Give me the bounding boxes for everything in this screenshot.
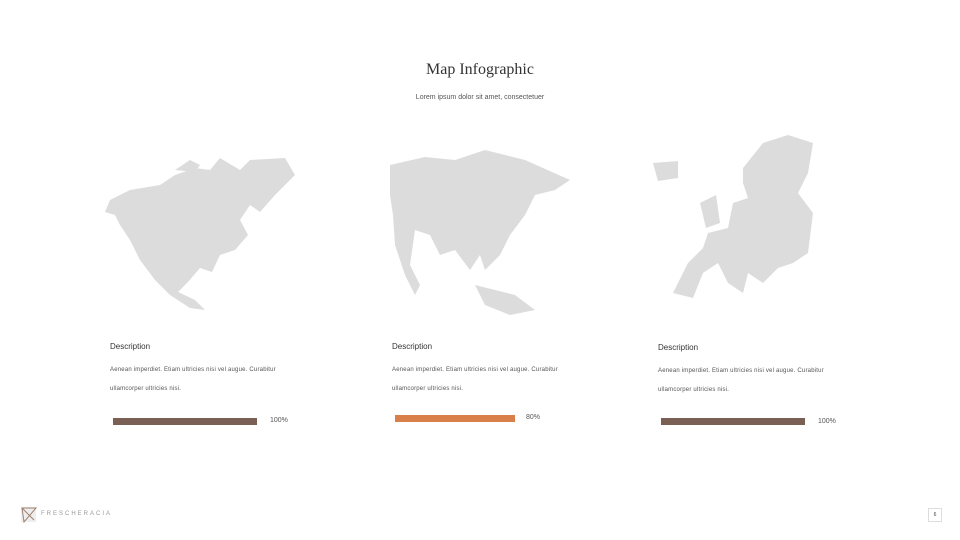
map: north america (105, 158, 295, 310)
label: 100% (270, 417, 288, 424)
label: 100% (818, 418, 836, 425)
panel: column 2 (392, 342, 558, 422)
page number: 6 (934, 512, 936, 518)
page number (928, 508, 942, 522)
map: europe (653, 135, 813, 298)
label: 80% (526, 414, 540, 421)
map: asia (390, 150, 570, 315)
logo (21, 507, 112, 523)
text: Aenean imperdiet. Etiam ultricies nisi vel augue. Curabitur ullamcorper ultricies nisi. (392, 367, 558, 392)
heading: Description (658, 343, 698, 352)
heading: Description (392, 342, 432, 351)
bar 80% (395, 415, 515, 422)
subtitle: Lorem ipsum dolor sit amet, consectetuer (416, 94, 544, 101)
text: Aenean imperdiet. Etiam ultricies nisi vel augue. Curabitur ullamcorper ultricies nisi. (110, 367, 276, 392)
panel: column 3 (658, 343, 836, 425)
logo text: FRESCHERACIA (41, 511, 112, 517)
title: Map Infographic (426, 61, 534, 78)
heading: Description (110, 342, 150, 351)
panel: column 1 (110, 342, 288, 425)
bar 100% (661, 418, 805, 425)
text: Aenean imperdiet. Etiam ultricies nisi vel augue. Curabitur ullamcorper ultricies nisi. (658, 368, 824, 393)
icon: logo mark (21, 507, 37, 523)
bar 100% (113, 418, 257, 425)
